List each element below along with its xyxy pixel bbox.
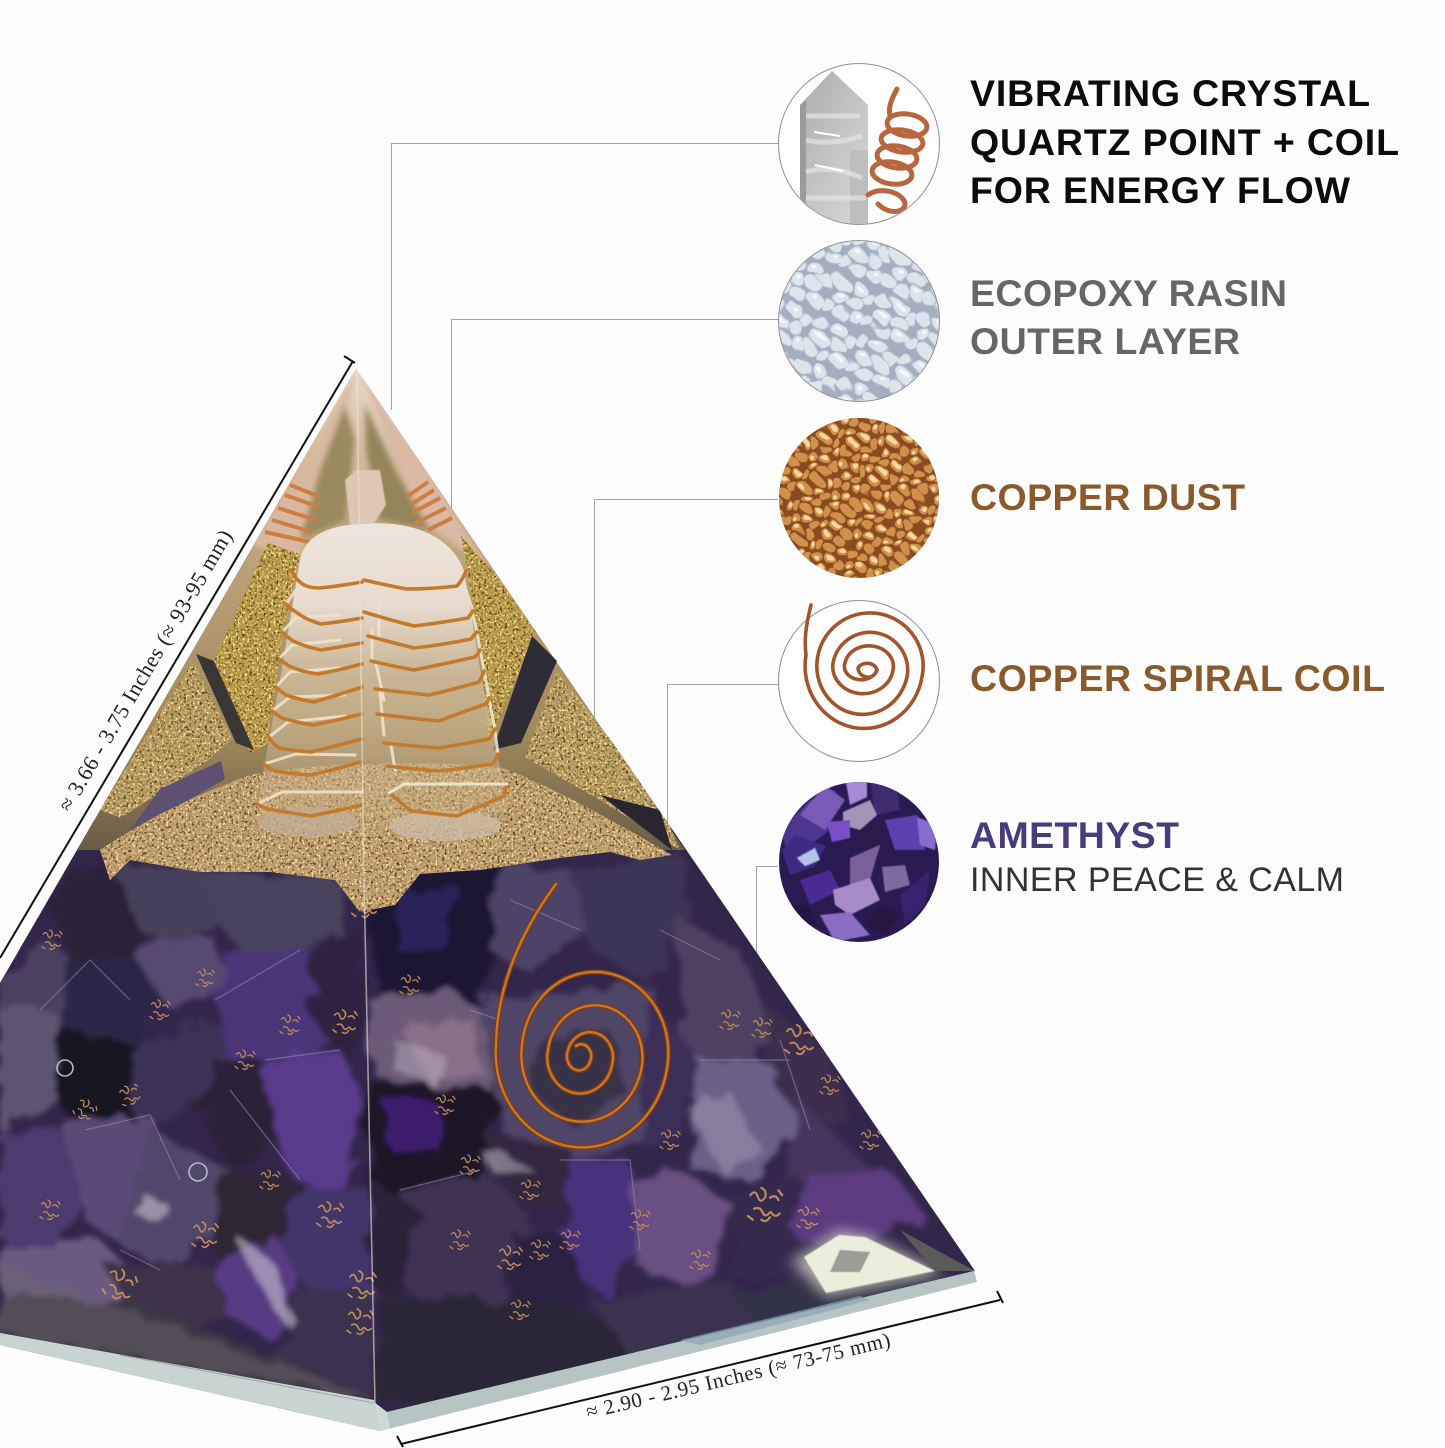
heading: spiral coil: COPPER SPIRAL COIL <box>970 657 1385 699</box>
gold dust left upper patch <box>214 543 300 753</box>
heading: resin: ECOPOXY RASIN <box>970 272 1287 314</box>
dark band right <box>493 636 557 750</box>
heading: resin <box>970 272 1287 362</box>
pyramid upper resin chamber <box>60 368 685 912</box>
dimension: height: ≈ 3.66 - 3.75 Inches (≈ 93-95 mm) <box>53 525 237 816</box>
purple glimpse left <box>130 761 225 830</box>
row 3: copper dust <box>779 418 1245 578</box>
icon: quartz point and coil <box>778 64 940 226</box>
row 5: amethyst <box>779 775 1344 942</box>
dark band left <box>196 654 254 750</box>
heading: resin: OUTER LAYER <box>970 320 1240 362</box>
icon: resin pellets <box>778 240 940 402</box>
leader lines <box>392 144 778 1020</box>
dimension: height <box>0 356 355 958</box>
copper dust disc <box>100 763 672 912</box>
heading: quartz point: VIBRATING CRYSTAL <box>970 72 1370 114</box>
dimension: base width: ≈ 2.90 - 2.95 Inches (≈ 73-75 mm) <box>584 1328 893 1424</box>
copper wire coil <box>257 570 507 816</box>
gold dust left lower patch <box>100 661 232 818</box>
pyramid photo <box>0 368 977 1431</box>
air bubbles <box>57 1060 207 1181</box>
copper spiral coil in pyramid <box>496 884 668 1147</box>
row 1: quartz point and coil <box>778 64 1399 226</box>
icon: copper granules <box>779 418 939 578</box>
bright reflection <box>790 1230 945 1297</box>
amethyst chips body <box>0 820 977 1431</box>
heading: quartz point <box>970 72 1399 211</box>
row 4: spiral coil <box>778 600 1385 762</box>
gold dust right upper patch <box>461 536 536 743</box>
icon: copper spiral <box>778 600 940 762</box>
small upper coil turns <box>265 482 452 542</box>
amethyst corner shadow <box>900 1230 975 1271</box>
crystal facet edges <box>40 900 810 1270</box>
heading: copper dust: COPPER DUST <box>970 476 1245 518</box>
icon: amethyst chips <box>779 775 939 942</box>
copper dust flecks <box>40 892 880 1334</box>
heading: quartz point: QUARTZ POINT + COIL <box>970 121 1399 163</box>
subheading: amethyst benefit: INNER PEACE & CALM <box>970 861 1344 899</box>
glass base rim <box>0 1271 977 1431</box>
dimension: base width <box>397 1291 1003 1447</box>
heading: amethyst: AMETHYST <box>970 814 1179 856</box>
row 2: resin <box>778 240 1284 402</box>
pyramid centre ridge <box>357 372 375 1403</box>
quartz point <box>258 470 507 841</box>
gold dust right lower patch <box>525 671 680 850</box>
heading: quartz point: FOR ENERGY FLOW <box>970 169 1351 211</box>
